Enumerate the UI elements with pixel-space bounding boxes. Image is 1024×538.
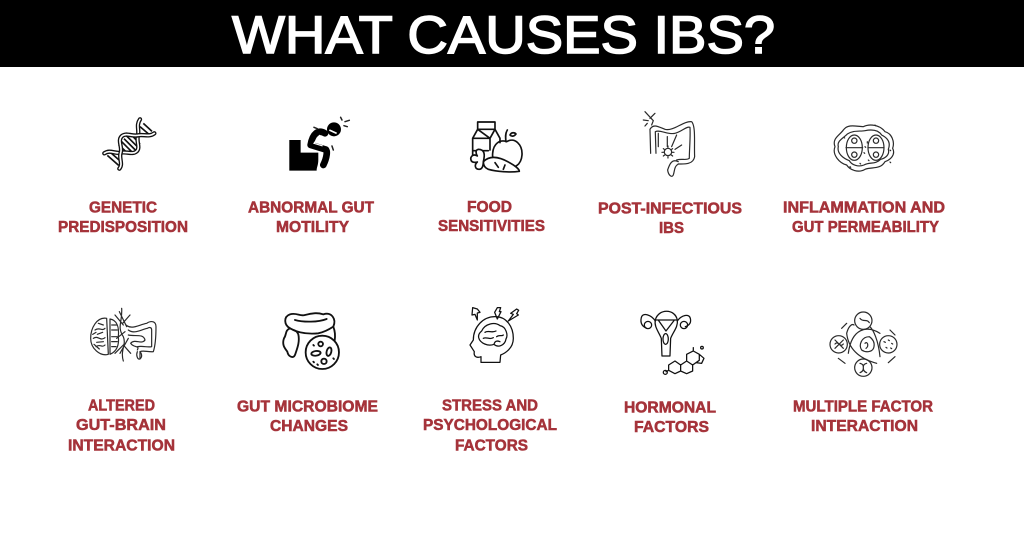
label: inflammation and gut permeability: INFLAMMATION AND	[783, 200, 945, 216]
label: food sensitivities	[438, 199, 545, 235]
label: genetic predisposition: GENETIC	[89, 200, 157, 216]
item: altered gut-brain interaction	[68, 308, 175, 454]
label: gut microbiome changes	[237, 398, 378, 435]
label: altered gut-brain interaction	[68, 398, 175, 454]
item: inflammation and gut permeability	[783, 125, 945, 236]
title banner	[0, 0, 1024, 67]
label: gut microbiome changes: CHANGES	[270, 418, 348, 435]
label: stress and psychological factors	[423, 398, 557, 454]
label: inflammation and gut permeability	[783, 200, 945, 236]
label: abnormal gut motility: ABNORMAL GUT	[248, 200, 374, 216]
icon: DNA helix	[104, 119, 154, 169]
label: multiple factor interaction: INTERACTION	[811, 418, 918, 435]
label: post-infectious IBS: POST-INFECTIOUS	[598, 200, 742, 218]
label: food sensitivities: FOOD	[467, 199, 512, 216]
label: post-infectious IBS: IBS	[659, 220, 684, 237]
icon: cells in inflamed tissue	[834, 125, 894, 171]
label: hormonal factors	[624, 400, 716, 436]
item: stress and psychological factors	[423, 308, 557, 454]
label: multiple factor interaction: MULTIPLE FACTOR	[793, 398, 933, 416]
label: altered gut-brain interaction: INTERACTION	[68, 438, 175, 454]
icon: head with brain and lightning	[470, 308, 519, 362]
label: genetic predisposition	[58, 200, 188, 236]
icon: uterus and steroid molecule	[641, 311, 704, 374]
label: stress and psychological factors: STRESS AND	[442, 398, 538, 414]
label: multiple factor interaction	[793, 398, 933, 435]
icon: colon with microbe circle	[283, 313, 339, 369]
label: hormonal factors: HORMONAL	[624, 400, 716, 416]
label: altered gut-brain interaction: GUT-BRAIN	[76, 417, 166, 434]
item: genetic predisposition	[58, 119, 188, 236]
icon: person doubled over on toilet	[289, 117, 349, 171]
item: abnormal gut motility	[248, 117, 374, 236]
label: abnormal gut motility: MOTILITY	[276, 219, 349, 236]
label: altered gut-brain interaction: ALTERED	[88, 398, 155, 414]
label: food sensitivities: SENSITIVITIES	[438, 218, 545, 235]
icon: four linked circles around gut	[830, 312, 897, 376]
item: hormonal factors	[624, 311, 716, 436]
label: abnormal gut motility	[248, 200, 374, 236]
icon: brain, nerves and intestines	[91, 308, 156, 361]
label: genetic predisposition: PREDISPOSITION	[58, 219, 188, 236]
title banner: WHAT CAUSES IBS?	[232, 6, 775, 65]
icon: milk carton, apple and carrot	[471, 122, 522, 172]
label: stress and psychological factors: FACTORS	[455, 438, 528, 454]
item: gut microbiome changes	[237, 313, 378, 435]
label: gut microbiome changes: GUT MICROBIOME	[237, 398, 378, 416]
item: post-infectious IBS	[598, 112, 742, 237]
label: inflammation and gut permeability: GUT PERMEABILITY	[792, 219, 939, 236]
label: stress and psychological factors: PSYCHOLOGICAL	[423, 417, 557, 434]
label: post-infectious IBS	[598, 200, 742, 237]
label: hormonal factors: FACTORS	[634, 419, 709, 436]
item: multiple factor interaction	[793, 312, 933, 435]
icon: colon with infection burst	[643, 112, 695, 176]
item: food sensitivities	[438, 122, 545, 235]
